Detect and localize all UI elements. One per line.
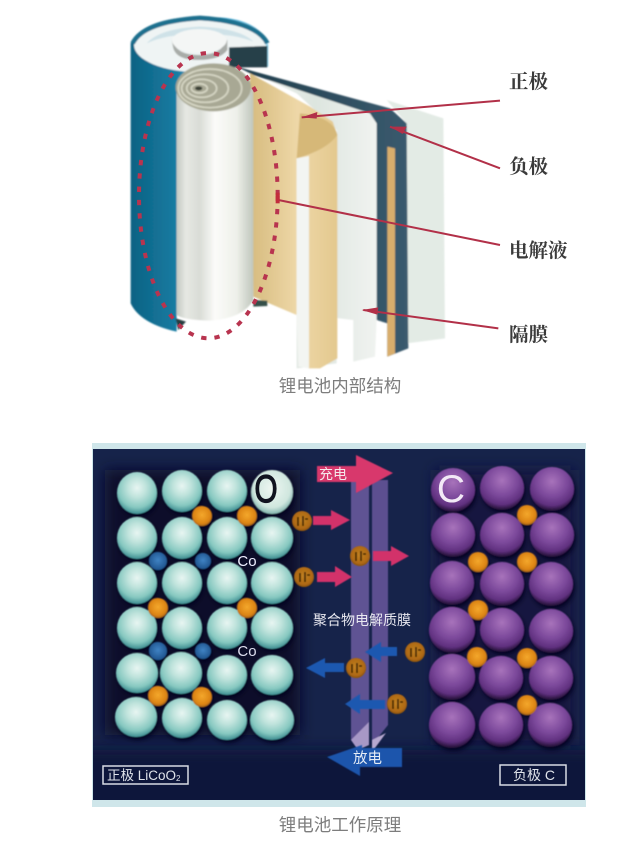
jelly roll body	[177, 88, 253, 321]
panel frame	[92, 443, 586, 807]
lithium ions in cathode	[148, 506, 257, 707]
lithium ions in anode	[467, 505, 537, 715]
cathode legend box: 2	[176, 774, 181, 783]
panel dark background	[93, 449, 585, 800]
charge arrow	[317, 455, 393, 493]
O label: O	[254, 468, 278, 511]
blue steel can	[131, 17, 268, 332]
dark tab	[229, 46, 267, 67]
leader line: electrolyte	[276, 193, 500, 245]
anode legend box	[500, 765, 566, 785]
charge arrow: 充电	[319, 466, 347, 482]
tan sheet curled lip	[297, 113, 337, 158]
caption: working principle: 锂电池工作原理	[279, 815, 401, 835]
positive terminal button	[172, 39, 227, 60]
C label: C	[437, 468, 465, 511]
cathode legend box: 正极 LiCoO	[107, 768, 176, 783]
label: 负极: 负极	[509, 151, 548, 179]
Co label top: Co	[237, 553, 257, 570]
anode legend box: 负极 C	[513, 767, 555, 783]
pink ion arrows	[313, 510, 409, 587]
caption: battery structure: 锂电池内部结构	[279, 376, 401, 396]
can dark foot marks	[176, 318, 186, 330]
anode spheres	[429, 466, 574, 748]
red dashed ellipse highlight	[139, 53, 278, 338]
membrane label: 聚合物电解质膜	[313, 612, 411, 628]
tan strip inside negative sheet	[387, 147, 395, 357]
positive electrode tan sheet	[250, 73, 337, 368]
discharge arrow	[327, 745, 402, 776]
spiral end	[176, 63, 251, 111]
blue ion arrows	[306, 642, 397, 714]
moving lithium ions	[292, 511, 425, 714]
negative electrode dark sheet	[237, 67, 408, 357]
can top rim	[133, 18, 267, 43]
cobalt atoms	[149, 552, 211, 660]
far separator layer	[387, 100, 445, 343]
middle separator layer	[253, 73, 377, 368]
Co label bottom: Co	[237, 643, 257, 660]
polymer electrolyte membrane	[351, 480, 388, 752]
leader line: positive	[302, 101, 500, 119]
cathode legend box	[103, 766, 188, 784]
label: 电解液: 电解液	[509, 235, 568, 263]
label: 正极: 正极	[509, 66, 548, 94]
label: 隔膜: 隔膜	[509, 319, 548, 347]
can top cap	[134, 18, 266, 72]
discharge arrow: 放电	[353, 750, 382, 767]
leader line: separator	[362, 307, 498, 328]
working principle panel	[92, 443, 586, 807]
battery internal structure illustration	[131, 17, 500, 368]
cathode spheres	[115, 470, 294, 740]
white slot	[297, 156, 309, 368]
leader line: negative	[390, 127, 500, 168]
